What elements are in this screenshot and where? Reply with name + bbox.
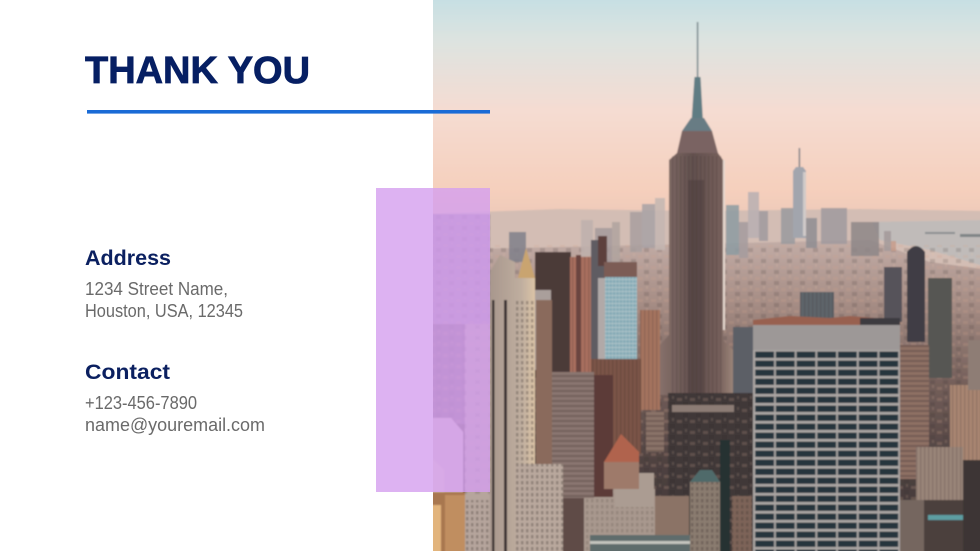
- mid-ground city fill: [425, 240, 980, 551]
- title: THANK YOU: [85, 50, 310, 92]
- city skyline photo: [433, 0, 980, 551]
- address block: [85, 246, 243, 321]
- address heading: Address: [85, 246, 171, 270]
- sky: [425, 0, 980, 225]
- phone: +123-456-7890: [85, 393, 197, 413]
- harbour water: [872, 220, 980, 268]
- city line: Houston, USA, 12345: [85, 301, 243, 321]
- One World Trade Center: [793, 148, 806, 238]
- Empire State Building: [660, 22, 733, 396]
- buildings behind lilac panel: [425, 214, 490, 551]
- street line: 1234 Street Name,: [85, 279, 228, 299]
- foreground centre blocks: [584, 327, 753, 551]
- downtown distant towers: [509, 192, 896, 262]
- left foreground towers: [465, 236, 660, 551]
- title divider line: [87, 110, 490, 114]
- large foreground office building: [753, 316, 900, 551]
- distant horizon haze: [425, 209, 980, 270]
- email: name@youremail.com: [85, 415, 265, 435]
- contact block: [85, 360, 265, 435]
- right-side buildings: [800, 246, 980, 551]
- contact heading: Contact: [85, 360, 170, 384]
- lilac accent panel: [376, 188, 490, 492]
